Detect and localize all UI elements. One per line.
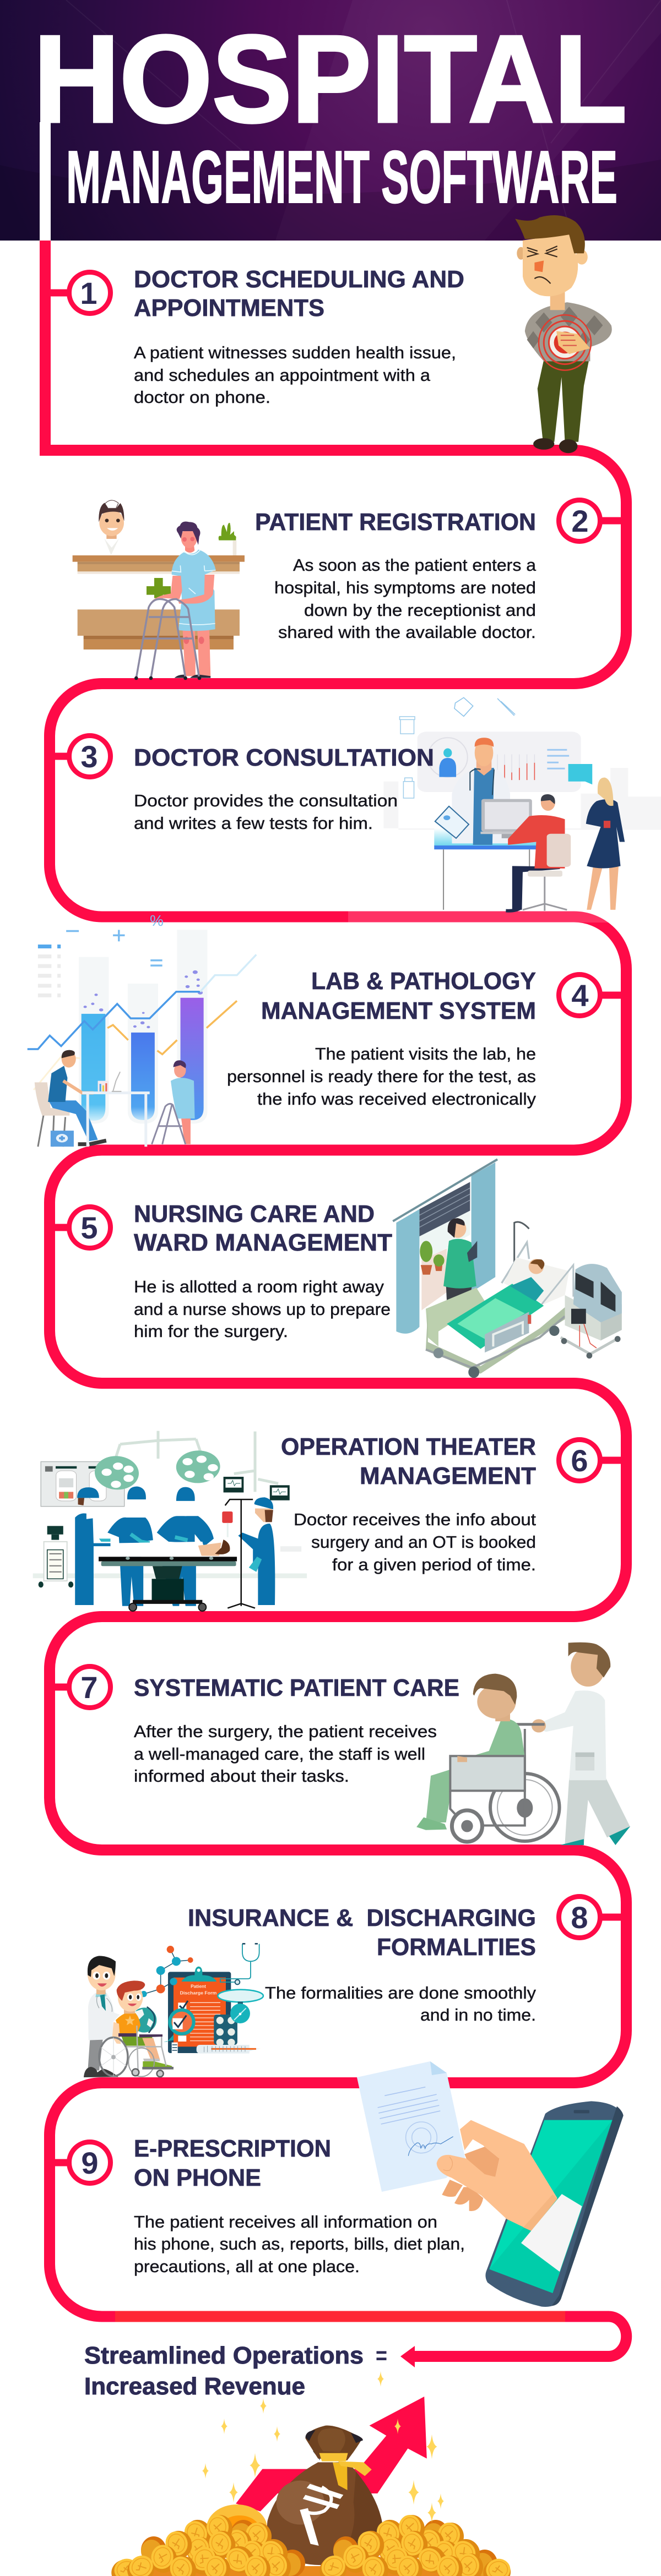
body 7: [134, 1722, 437, 1786]
body 3: and writes a few tests for him.: [134, 814, 373, 833]
illustration: phone with e-prescription: [357, 2061, 624, 2307]
badge 4: 4: [571, 978, 589, 1013]
heading 1: [134, 266, 464, 321]
title: HOSPITAL: [34, 9, 627, 148]
form label text: Patient: [191, 1984, 206, 1989]
illustration: operating theatre with surgeons: [33, 1431, 307, 1611]
heading 8: INSURANCE & DISCHARGING: [188, 1904, 536, 1931]
illustration: ward room with nurse and bed: [393, 1159, 622, 1378]
form label text: Discharge Form: [180, 1990, 216, 1995]
body 5: [134, 1277, 391, 1341]
badge 5: [55, 1207, 110, 1248]
badge 9: 9: [81, 2146, 99, 2180]
heading 9: E-PRESCRIPTION: [134, 2135, 331, 2162]
body 6: for a given period of time.: [332, 1555, 536, 1574]
heading 6: MANAGEMENT: [360, 1462, 536, 1489]
body 9: his phone, such as, reports, bills, diet plan,: [134, 2234, 465, 2253]
body 7: informed about their tasks.: [134, 1766, 349, 1786]
badge 2: 2: [571, 504, 589, 538]
illustration: lab test tubes and chart: [28, 930, 256, 1147]
body 6: [294, 1510, 536, 1574]
panel: step 6: [33, 1431, 621, 1611]
badge 6: [559, 1440, 621, 1481]
body 1: A patient witnesses sudden health issue,: [134, 343, 456, 362]
panel: step 7: [55, 1642, 630, 1845]
conclusion text: =: [376, 2342, 387, 2369]
badge 2: [559, 500, 621, 542]
sparkles: [202, 2371, 444, 2523]
badge 5: 5: [80, 1210, 98, 1245]
conclusion text: Increased Revenue: [84, 2373, 305, 2400]
body 4: the info was received electronically: [257, 1089, 537, 1109]
body 7: After the surgery, the patient receives: [134, 1722, 437, 1741]
body 5: and a nurse shows up to prepare: [134, 1300, 391, 1319]
body 2: As soon as the patient enters a: [293, 555, 537, 575]
body 9: [134, 2212, 465, 2276]
badge 1: 1: [80, 276, 97, 310]
heading 5: NURSING CARE AND: [134, 1200, 375, 1227]
growth arrow: [236, 2397, 427, 2512]
body 2: hospital, his symptoms are noted: [274, 578, 536, 597]
badge 1: [51, 272, 110, 314]
heading 1: APPOINTMENTS: [134, 294, 324, 321]
heading 8: [188, 1904, 536, 1961]
form label text: [180, 1984, 216, 1995]
badge 8: [559, 1897, 621, 1938]
arrow head pointing at conclusion: [400, 2346, 415, 2367]
body 2: down by the receptionist and: [304, 601, 536, 620]
illustration: doctor consultation: [383, 697, 661, 911]
body 3: Doctor provides the consultation: [134, 791, 398, 810]
panel: step 2: [73, 500, 621, 680]
heading 4: [261, 968, 536, 1024]
heading 3: DOCTOR CONSULTATION: [134, 744, 434, 771]
coin pile: [109, 2515, 513, 2576]
body 4: The patient visits the lab, he: [315, 1044, 536, 1063]
panel: step 5: [55, 1159, 622, 1378]
heading 5: WARD MANAGEMENT: [134, 1229, 392, 1256]
badge 6: 6: [571, 1443, 588, 1478]
heading 6: OPERATION THEATER: [281, 1433, 536, 1460]
panel: step 8: [84, 1897, 621, 2077]
panel: step 3: [55, 697, 661, 911]
heading 4: LAB & PATHOLOGY: [311, 968, 536, 995]
heading 4: MANAGEMENT SYSTEM: [261, 997, 536, 1024]
body 4: personnel is ready there for the test, as: [227, 1067, 536, 1086]
badge 9: [55, 2142, 110, 2183]
badge 4: [559, 974, 621, 1016]
body 5: him for the surgery.: [134, 1322, 288, 1341]
body 8: [265, 1983, 537, 2024]
panel: step 4: [28, 912, 621, 1147]
illustration: money bag, growth arrow and coins: [109, 2371, 513, 2576]
body 9: The patient receives all information on: [134, 2212, 437, 2231]
header banner: [0, 0, 661, 241]
body 6: surgery and an OT is booked: [311, 1532, 536, 1552]
badge 3: 3: [80, 739, 98, 774]
body 6: Doctor receives the info about: [294, 1510, 536, 1529]
heading 6: [281, 1433, 536, 1489]
badge 3: [55, 735, 110, 777]
illustration: doctor, boy and discharge form: [84, 1943, 263, 2077]
body 8: and in no time.: [420, 2005, 536, 2024]
heading 1: DOCTOR SCHEDULING AND: [134, 266, 464, 293]
title: [34, 9, 627, 219]
illustration: sick man holding stomach: [515, 215, 612, 453]
heading 9: [134, 2135, 331, 2191]
panel: step 9: [55, 2061, 624, 2307]
large coin behind bag: [207, 2504, 267, 2552]
body 3: [134, 791, 398, 833]
body 7: a well-managed care, the staff is well: [134, 1744, 425, 1764]
heading 9: ON PHONE: [134, 2164, 261, 2191]
body 2: [274, 555, 537, 642]
body 4: [227, 1044, 537, 1109]
conclusion text: [84, 2342, 387, 2400]
body 5: He is allotted a room right away: [134, 1277, 384, 1296]
percent sign decoration: %: [150, 912, 164, 929]
body 1: [134, 343, 456, 407]
heading 2: PATIENT REGISTRATION: [255, 509, 536, 536]
body 1: and schedules an appointment with a: [134, 365, 431, 385]
money bag: [267, 2426, 382, 2565]
ribbon path connecting all steps: [45, 122, 626, 2356]
conclusion text: Streamlined Operations: [84, 2342, 364, 2369]
body 2: shared with the available doctor.: [278, 623, 536, 642]
heading 8: FORMALITIES: [377, 1934, 536, 1961]
badge 7: 7: [80, 1670, 98, 1705]
body 9: precautions, all at one place.: [134, 2257, 360, 2276]
badge 7: [55, 1667, 110, 1707]
heading 5: [134, 1200, 392, 1256]
illustration: nurse pushing patient in wheelchair: [416, 1642, 630, 1845]
body 1: doctor on phone.: [134, 388, 270, 407]
badge 8: 8: [571, 1900, 588, 1935]
body 8: The formalities are done smoothly: [265, 1983, 537, 2002]
heading 7: SYSTEMATIC PATIENT CARE: [134, 1674, 459, 1701]
illustration: reception desk with patient and walker: [73, 500, 245, 680]
panel: step 1: [51, 215, 612, 453]
